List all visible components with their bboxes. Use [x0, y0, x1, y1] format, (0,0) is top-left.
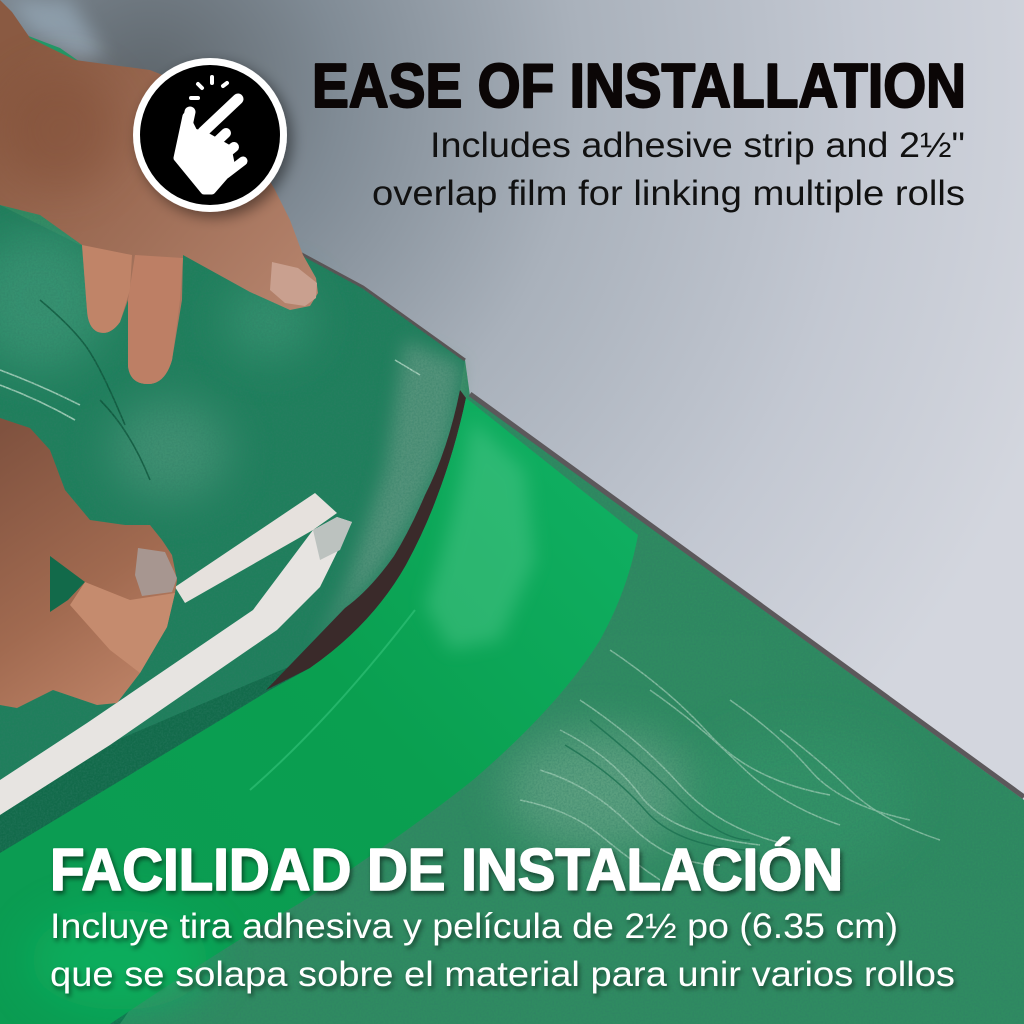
green overlap film: [0, 398, 638, 1024]
lower hand: [0, 418, 177, 708]
icon: hand: [177, 77, 243, 191]
white adhesive strip: [0, 493, 352, 815]
text: spanish description: [50, 907, 955, 994]
text: english description: Includes adhesive strip and 2½": [430, 126, 965, 165]
title: spanish: FACILIDAD DE INSTALACIÓN: [50, 837, 843, 903]
dark gap under flap: [266, 390, 466, 690]
text: spanish description: que se solapa sobre el material para unir varios rollos: [50, 955, 955, 994]
floor grain texture: [0, 224, 1017, 1024]
peeled translucent underlayment flap: [0, 205, 465, 790]
upper hand: [0, 0, 318, 384]
text: english description: overlap film for linking multiple rolls: [372, 174, 965, 213]
badge: pointing hand snap icon: [133, 58, 287, 212]
text: english description: [372, 126, 965, 213]
text: spanish description: Incluye tira adhesiva y película de 2½ po (6.35 cm): [50, 907, 898, 946]
